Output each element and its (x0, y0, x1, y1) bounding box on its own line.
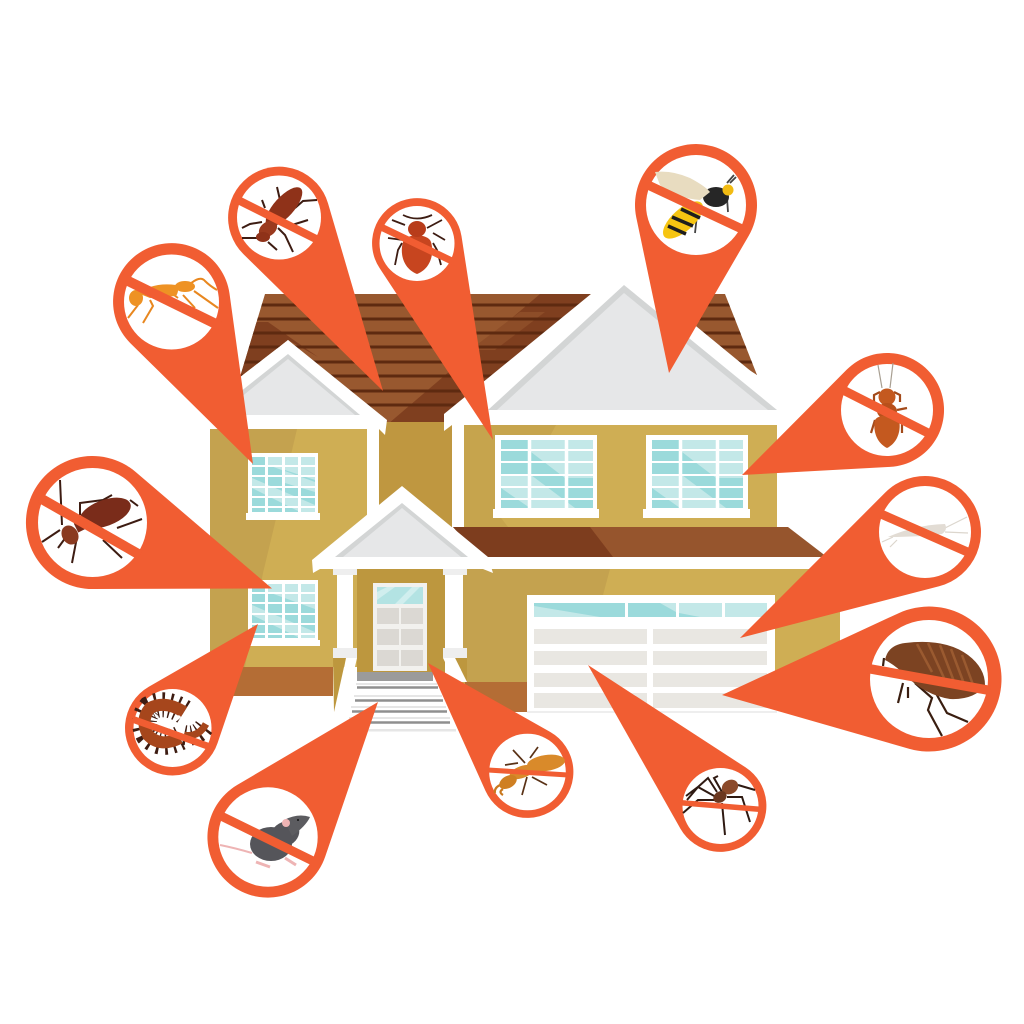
house (210, 267, 840, 732)
prohibition slash (881, 514, 972, 554)
prohibition slash (379, 226, 456, 263)
prohibition slash (238, 200, 318, 240)
icon: bed bug (388, 215, 445, 274)
porch columns (333, 569, 467, 715)
prohibition slash (843, 390, 930, 434)
pin: centipede (125, 624, 258, 775)
prohibition slash (681, 803, 759, 809)
prohibition slash (868, 668, 990, 690)
icon: termite (495, 747, 566, 795)
walls (210, 420, 840, 712)
window upper middle (493, 435, 599, 518)
pin: bed bug (372, 198, 493, 440)
porch roof (453, 527, 827, 569)
icon: flea (883, 642, 985, 736)
pin: flea (722, 607, 1002, 752)
prohibition slash (648, 185, 744, 230)
icon: silverfish (882, 517, 968, 547)
icon: ant (128, 279, 218, 323)
pin: ant (113, 243, 253, 464)
icon: wasp (655, 172, 736, 245)
icon: rat (220, 816, 310, 867)
icon: spider (683, 776, 755, 835)
front door (373, 583, 427, 671)
pin: termite (428, 663, 573, 818)
pin: wasp (635, 144, 757, 373)
prohibition slash (219, 815, 317, 863)
prohibition slash (40, 498, 140, 555)
prohibition slash (132, 719, 213, 748)
main gable (444, 267, 792, 529)
pin: beetle (228, 167, 383, 391)
garage door (527, 595, 777, 713)
pin: rat (207, 702, 378, 898)
door wall (357, 569, 445, 673)
pin: spider (588, 665, 766, 852)
front steps (349, 672, 456, 732)
window upper left (246, 453, 320, 520)
upper left gable (240, 340, 387, 519)
icon: centipede (144, 705, 206, 742)
prohibition slash (122, 278, 220, 326)
pediment (312, 486, 493, 573)
prohibition slash (488, 770, 568, 775)
icon: beetle (242, 182, 317, 252)
window lower left (246, 580, 320, 646)
icon: cockroach (42, 480, 142, 563)
pin: silverfish (740, 476, 981, 638)
icon: earwig (871, 363, 907, 448)
pin: earwig (742, 353, 944, 475)
window upper right (643, 435, 750, 518)
illustration: house with pest map pins (26, 144, 1002, 898)
pin: cockroach (26, 456, 272, 589)
main roof (230, 290, 770, 425)
